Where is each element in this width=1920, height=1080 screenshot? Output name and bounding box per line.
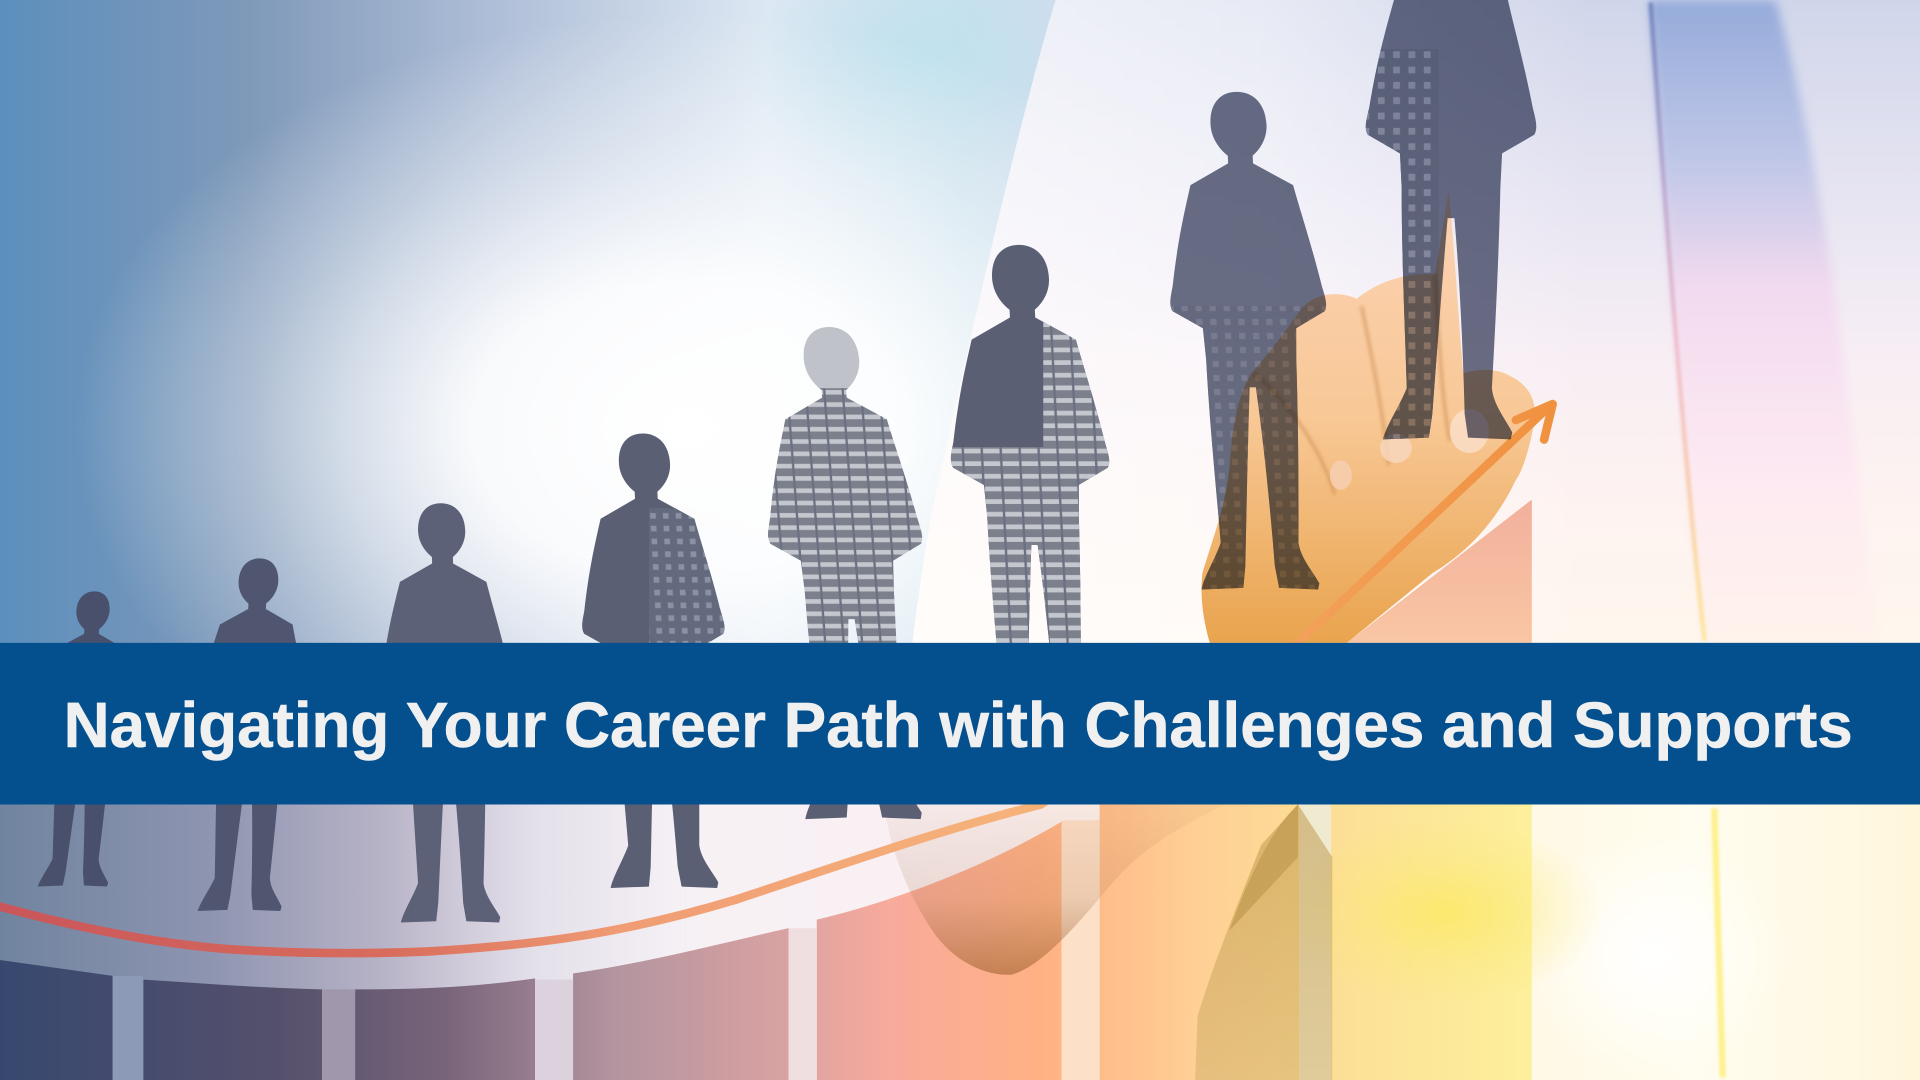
title banner [0,643,1920,804]
yellow lens flare [1286,820,1604,1004]
silhouette: person 5 [768,327,922,820]
silhouette: person 6 [950,244,1110,643]
finger creases [1254,274,1450,495]
silhouette: person 3 [375,503,519,923]
silhouette: person 4 [582,434,724,888]
bar gaps tinted [113,804,1331,1080]
tie [1649,0,1880,1078]
shirt sleeve and body below the banner [884,804,1332,1080]
bar chart: rising bars [0,500,1532,1080]
rising bar tip above banner [1347,500,1532,643]
hand pointing up [1202,191,1535,643]
silhouette: person 2 [187,558,315,911]
silhouette: person 7 [1170,92,1326,590]
silhouette: person 1 [29,591,140,886]
silhouette: person 8 [1366,0,1536,439]
title: Navigating Your Career Path with Challenges and Supports [64,690,1853,761]
career curve arrow [0,404,1553,953]
white shirt [912,0,1920,643]
